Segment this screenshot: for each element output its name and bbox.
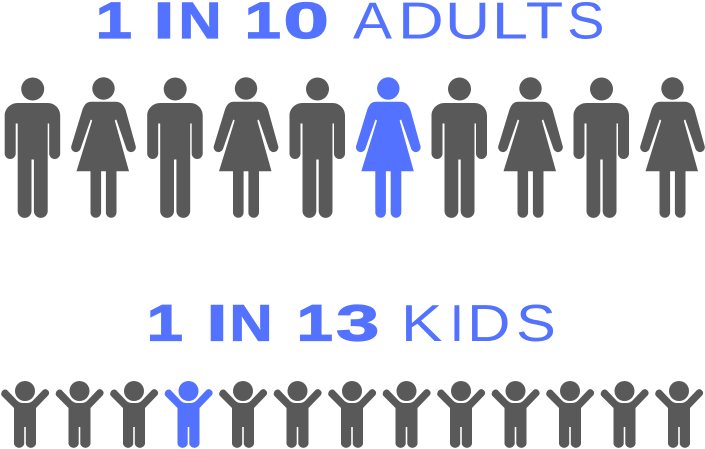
icon: kid 9 bbox=[437, 381, 485, 448]
heading: 1 in 13 kids: I bbox=[207, 295, 227, 352]
icon: woman 4 bbox=[498, 77, 563, 218]
icon: kid 13 bbox=[655, 381, 703, 448]
icon: man 2 bbox=[147, 78, 203, 218]
heading: 1 in 13 kids: I bbox=[450, 295, 464, 353]
icon: kid 5 bbox=[219, 381, 267, 448]
icon: man 3 bbox=[290, 78, 345, 218]
heading: 1 in 13 kids: N bbox=[230, 295, 272, 352]
icon: kid 11 bbox=[546, 381, 594, 448]
icon: kid 7 bbox=[328, 381, 376, 448]
icon: woman 5 bbox=[640, 77, 705, 218]
heading: 1 in 13 kids: D bbox=[467, 295, 510, 353]
icon: kid 6 bbox=[274, 381, 322, 448]
icon: kid 10 bbox=[492, 381, 540, 448]
icon: kid 8 bbox=[383, 381, 431, 448]
adult figures row bbox=[5, 77, 705, 218]
heading: 1 in 13 kids: K bbox=[401, 295, 443, 353]
icon: kid 4 highlighted bbox=[165, 381, 213, 448]
heading: 1 in 13 kids bbox=[147, 295, 556, 353]
icon: kid 1 bbox=[1, 381, 49, 448]
icon: kid 12 bbox=[601, 381, 649, 448]
icon: man 4 bbox=[432, 78, 487, 218]
icon: woman 2 bbox=[214, 77, 278, 218]
heading: 1 in 13 kids: 1 bbox=[297, 295, 333, 352]
kid figures row bbox=[1, 381, 703, 448]
icon: kid 2 bbox=[56, 381, 104, 448]
icon: man 5 bbox=[574, 78, 629, 218]
icon: kid 3 bbox=[110, 381, 158, 448]
heading: 1 in 13 kids: S bbox=[516, 295, 556, 353]
heading: 1 in 13 kids: 1 bbox=[147, 295, 183, 352]
heading: 1 in 10 adults bbox=[96, 0, 605, 50]
heading: 1 in 13 kids: 3 bbox=[336, 295, 379, 352]
icon: man 1 bbox=[5, 78, 60, 218]
icon: woman 1 bbox=[71, 77, 136, 218]
icon: woman 3 highlighted bbox=[356, 77, 421, 218]
